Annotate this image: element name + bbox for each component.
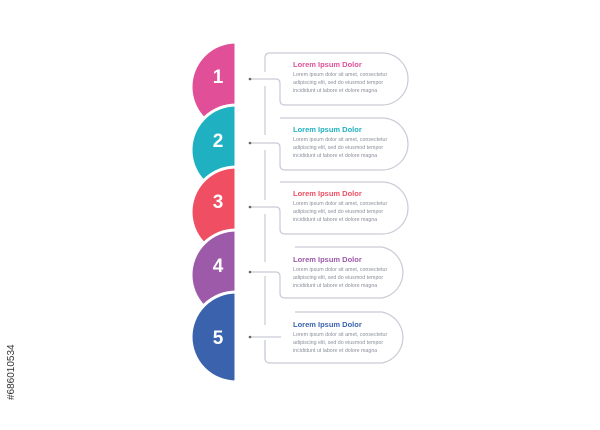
- box 4: [249, 247, 403, 298]
- text 3: [293, 189, 387, 223]
- box 1: [249, 53, 408, 105]
- step 1 half-circle: [191, 42, 236, 132]
- box 5: [249, 312, 403, 363]
- side id text: #686010534: [6, 344, 17, 400]
- text 3: incididunt ut labore et dolore magna: [293, 217, 377, 223]
- text 2: Lorem ipsum dolor sit amet, consectetur: [293, 137, 387, 143]
- text 1: incididunt ut labore et dolore magna: [293, 88, 377, 94]
- step 2 half-circle: 2: [213, 131, 223, 152]
- text 5: Lorem Ipsum Dolor: [293, 320, 362, 329]
- text 1: Lorem Ipsum Dolor: [293, 60, 362, 69]
- text 5: incididunt ut labore et dolore magna: [293, 348, 377, 354]
- text 1: adipiscing elit, sed do eiusmod tempor: [293, 80, 383, 86]
- step 3 half-circle: [191, 167, 236, 257]
- text 5: adipiscing elit, sed do eiusmod tempor: [293, 340, 383, 346]
- text 1: [293, 60, 387, 94]
- text 3: Lorem Ipsum Dolor: [293, 189, 362, 198]
- text 1: Lorem ipsum dolor sit amet, consectetur: [293, 72, 387, 78]
- text 3: Lorem ipsum dolor sit amet, consectetur: [293, 201, 387, 207]
- step 2 half-circle: [191, 105, 236, 195]
- text 4: incididunt ut labore et dolore magna: [293, 283, 377, 289]
- text 5: [293, 320, 387, 354]
- text 4: [293, 255, 387, 289]
- text 5: Lorem ipsum dolor sit amet, consectetur: [293, 332, 387, 338]
- text 2: adipiscing elit, sed do eiusmod tempor: [293, 145, 383, 151]
- box 3: [249, 182, 408, 234]
- text 2: incididunt ut labore et dolore magna: [293, 153, 377, 159]
- step 4 half-circle: [191, 230, 236, 320]
- step 5 half-circle: 5: [213, 328, 224, 349]
- step 1 half-circle: 1: [213, 67, 224, 88]
- step 3 half-circle: 3: [213, 192, 223, 213]
- text 4: Lorem Ipsum Dolor: [293, 255, 362, 264]
- text 2: [293, 125, 387, 159]
- text 3: adipiscing elit, sed do eiusmod tempor: [293, 209, 383, 215]
- step 5 half-circle: [191, 292, 236, 382]
- text 4: adipiscing elit, sed do eiusmod tempor: [293, 275, 383, 281]
- text 4: Lorem ipsum dolor sit amet, consectetur: [293, 267, 387, 273]
- step 4 half-circle: 4: [213, 256, 224, 277]
- box 2: [249, 118, 408, 170]
- text 2: Lorem Ipsum Dolor: [293, 125, 362, 134]
